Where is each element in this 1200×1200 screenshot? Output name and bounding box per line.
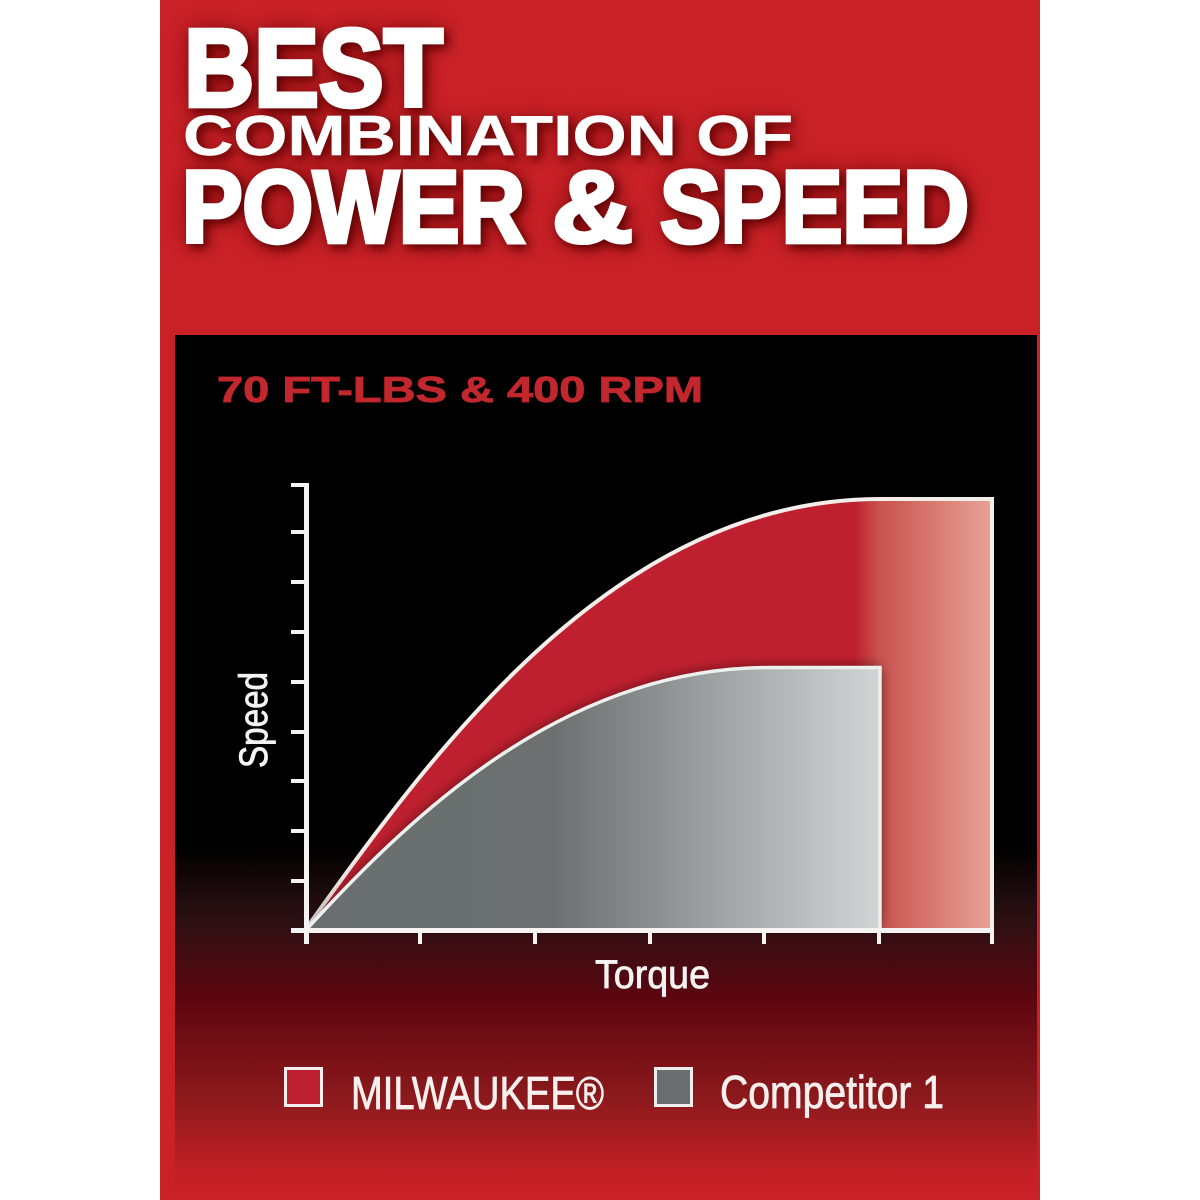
legend label: Milwaukee: MILWAUKEE®: [351, 1067, 604, 1119]
chart subtitle: 70 FT-LBS & 400 RPM: [217, 369, 703, 410]
Competitor outline: [306, 668, 880, 931]
red background panel: [160, 0, 1040, 1200]
title: [182, 7, 969, 264]
title line: SPEED: SPEED: [660, 150, 969, 264]
legend swatch: Milwaukee: [286, 1068, 322, 1106]
legend label: Competitor 1: Competitor 1: [720, 1066, 944, 1118]
Milwaukee red area: [306, 499, 992, 929]
title line: COMBINATION OF: COMBINATION OF: [183, 104, 793, 168]
torque axis with ticks: [291, 928, 994, 944]
Competitor gray area: [306, 668, 880, 930]
y axis label: Speed: [232, 672, 276, 768]
area chart: [232, 483, 994, 997]
legend: [286, 1066, 944, 1119]
chart panel background: [175, 335, 1037, 1200]
title line: BEST: BEST: [184, 7, 443, 130]
x axis label: Torque: [595, 953, 710, 997]
legend swatch: Competitor 1: [656, 1068, 692, 1106]
title line: ampersand: &: [552, 150, 633, 264]
speed axis with ticks: [291, 483, 309, 944]
Milwaukee outline: [306, 499, 992, 931]
title line: POWER: POWER: [182, 150, 525, 264]
